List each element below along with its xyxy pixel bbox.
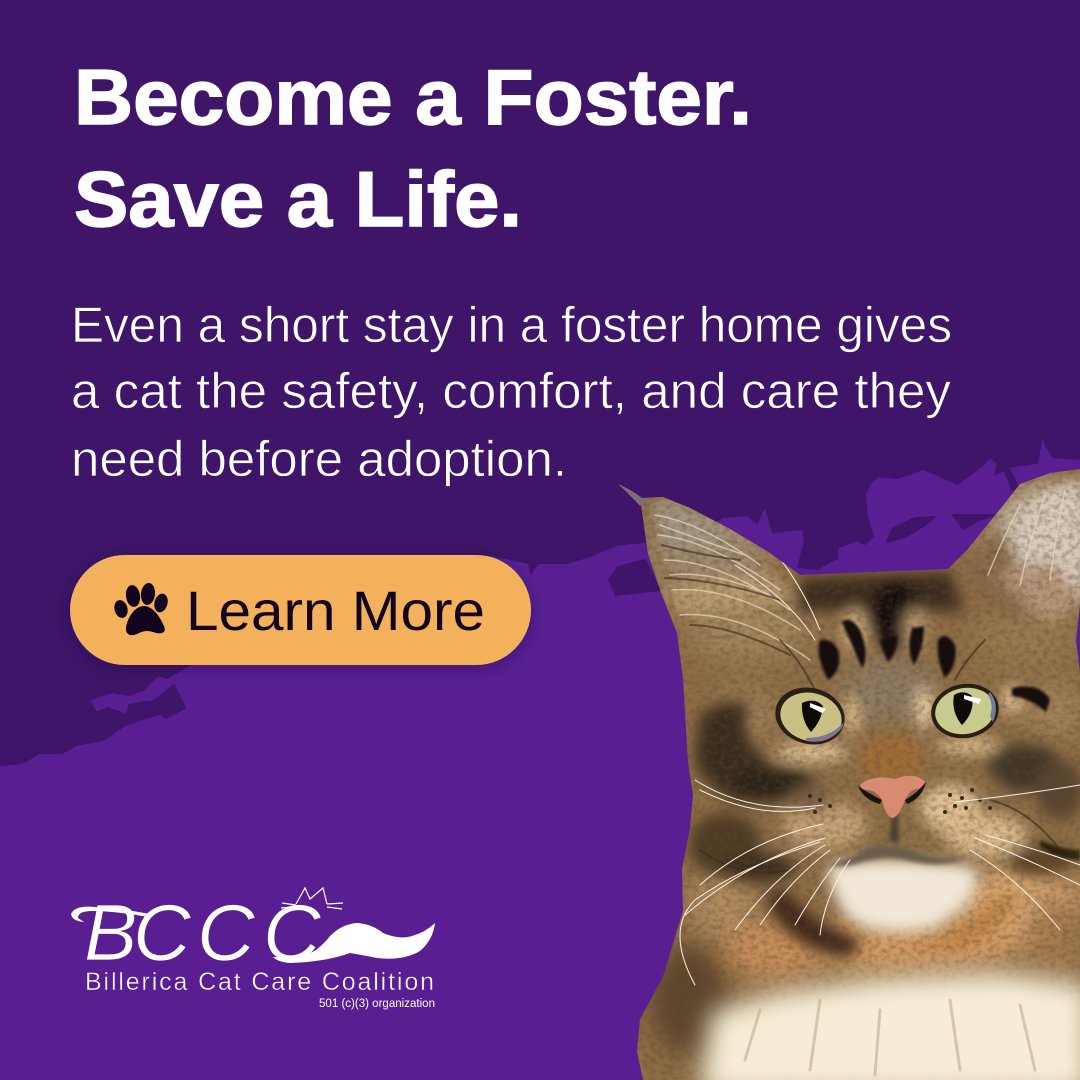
fur texture [620, 460, 1080, 1080]
chin [828, 859, 977, 932]
muzzle [860, 734, 926, 782]
background: dark map shape [0, 0, 1080, 765]
logo tagline: 501 (c)(3) organization [319, 998, 435, 1010]
body text: a cat the safety, comfort, and care they [71, 363, 951, 419]
logo: Billerica Cat Care Coalition [71, 888, 435, 1010]
dark tabby markings [819, 620, 1080, 860]
photo: tabby cat [620, 460, 1080, 1080]
body text [71, 297, 952, 487]
eye: right [931, 684, 999, 738]
fur strokes [655, 490, 1065, 1075]
ear tones [650, 498, 725, 550]
ear wisp [618, 484, 650, 506]
title [74, 53, 752, 243]
logo script letters: BCCC [84, 888, 322, 977]
cheeks [695, 702, 815, 803]
body text: Even a short stay in a foster home gives [71, 297, 952, 353]
eye: left [775, 688, 845, 744]
forehead [798, 572, 965, 640]
button label: Learn More [186, 579, 485, 642]
logo cat ears and whiskers [281, 888, 343, 909]
button: learn more [70, 555, 531, 665]
title: Become a Foster. [74, 53, 752, 141]
mouth and muzzle shade [828, 815, 968, 866]
logo name: Billerica Cat Care Coalition [85, 968, 434, 996]
logo flourish [71, 907, 150, 922]
icon: paw [112, 582, 170, 635]
logo tail [273, 923, 435, 963]
nose [858, 776, 926, 818]
body text: need before adoption. [71, 431, 567, 487]
whiskers [680, 540, 1080, 985]
eye surrounds [776, 743, 848, 761]
chest ruff [700, 972, 1080, 1080]
collar [765, 890, 862, 958]
title: Save a Life. [74, 155, 522, 243]
